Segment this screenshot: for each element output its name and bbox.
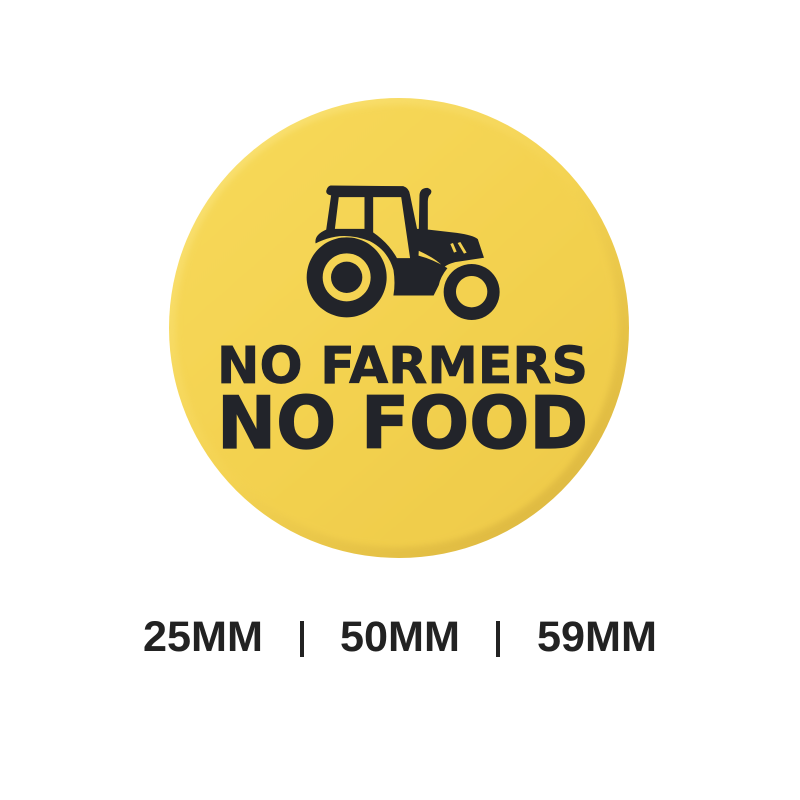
badge text: NO FARMERS: NO FARMERS [217,336,588,395]
size label: 25MM: 25MM [143,613,263,661]
separator [496,621,500,657]
separator [300,621,304,657]
badge text: NO FOOD: NO FOOD [217,381,588,465]
icon: tractor [307,186,500,320]
size label: 59MM: 59MM [537,613,657,661]
large rear wheel [307,237,387,317]
size label: 50MM: 50MM [340,613,460,661]
yellow badge [169,98,629,558]
vents [450,242,467,254]
tractor cab and body [316,186,483,295]
small front wheel [444,264,500,320]
